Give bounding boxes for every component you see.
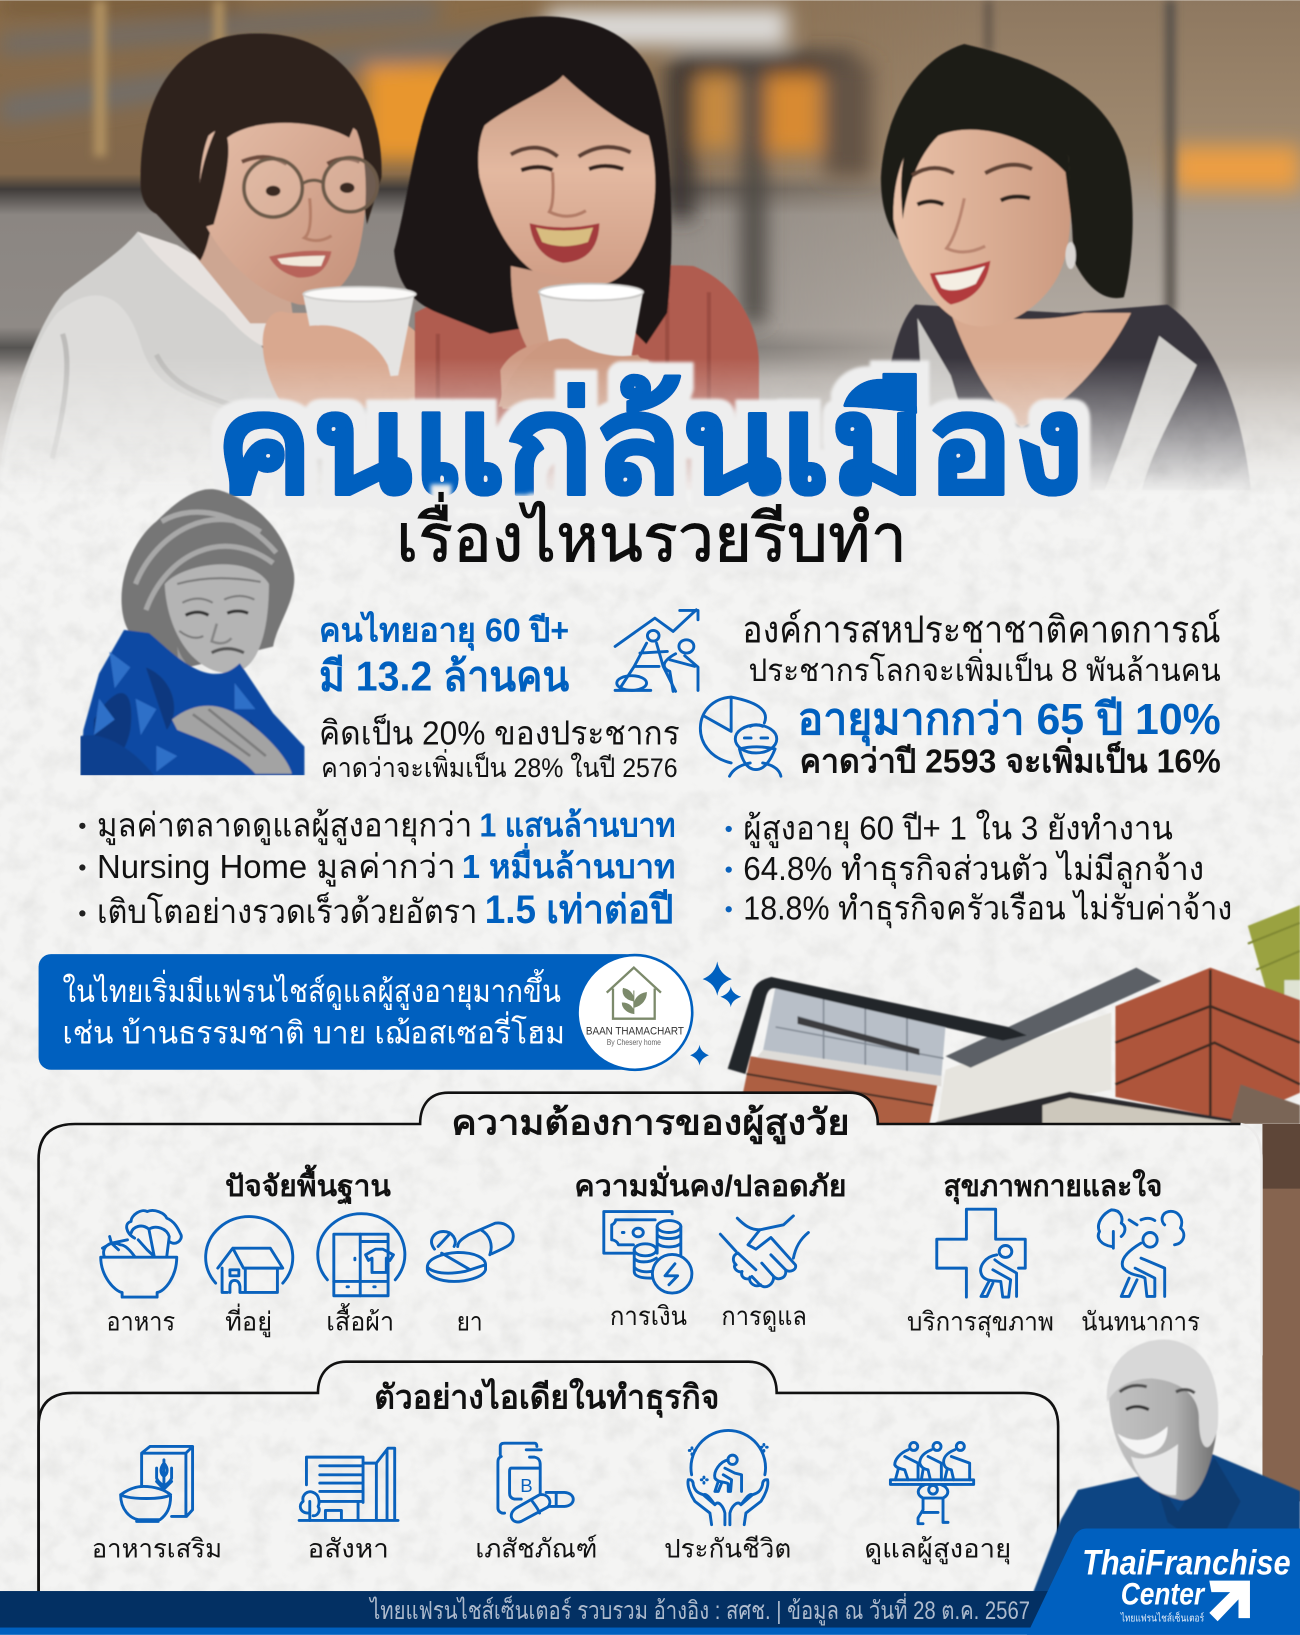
logo: Baan Thamachart: BAAN THAMACHART — [586, 1025, 684, 1037]
stat: UN world population: คาดว่าปี 2593 จะเพิ่มเป็น 16% — [800, 737, 1221, 781]
heading: ตัวอย่างไอเดียในทำธุรกิจ — [374, 1378, 719, 1419]
icon: handshake — [720, 1216, 808, 1287]
callout banner: franchise examples — [39, 954, 692, 1070]
market value bullets: มูลค่าตลาดดูแลผู้สูงอายุกว่า — [97, 807, 472, 845]
heading: basics: ปัจจัยพื้นฐาน — [225, 1164, 391, 1205]
stat: Thai elderly population: คาดว่าจะเพิ่มเป็น 28% ในปี 2576 — [321, 749, 678, 783]
icon: food bowl — [101, 1210, 181, 1297]
stat: Thai elderly population: คนไทยอายุ 60 ปี+ — [319, 610, 569, 651]
label: life insurance: ประกันชีวิต — [664, 1534, 791, 1564]
market value bullets: 1.5 เท่าต่อปี — [485, 888, 673, 932]
woman right — [881, 44, 1251, 490]
stat: UN world population: อายุมากกว่า 65 ปี 10% — [798, 695, 1221, 747]
heading: health: สุขภาพกายและใจ — [943, 1169, 1162, 1204]
icon: real estate building — [299, 1448, 398, 1520]
woman left — [0, 33, 422, 490]
stat: Thai elderly population: คิดเป็น 20% ของประชากร — [319, 713, 680, 753]
working elders bullets: 18.8% ทำธุรกิจครัวเรือน ไม่รับค่าจ้าง — [743, 890, 1232, 929]
photo: care home building — [728, 905, 1300, 1128]
subtitle: เรื่องไหนรวยรีบทำ — [396, 492, 907, 576]
working elders bullets — [726, 809, 1232, 929]
icon: pie chart with old man — [700, 697, 781, 776]
icon: pills — [427, 1223, 513, 1281]
stat: UN world population: องค์การสหประชาชาติคาดการณ์ — [742, 608, 1221, 650]
panel: needs of the elderly — [39, 1093, 1261, 1595]
icon: rising arrow with elders — [615, 610, 698, 691]
label: recreation: นันทนาการ — [1081, 1306, 1200, 1336]
logo: Baan Thamachart: By Chesery home — [607, 1038, 661, 1047]
label: property: อสังหา — [308, 1534, 389, 1564]
icon: hands holding elder — [688, 1430, 768, 1525]
icon: vitamin bottle and capsules — [498, 1443, 573, 1522]
stat: UN world population: ประชากรโลกจะเพิ่มเป็น 8 พันล้านคน — [749, 648, 1221, 688]
label: finance: การเงิน — [610, 1301, 687, 1331]
label: supplements: อาหารเสริม — [92, 1534, 222, 1564]
logo: ThaiFranchise Center — [1027, 1528, 1300, 1635]
label: medicine: ยา — [457, 1306, 483, 1336]
photo: smiling old man — [1032, 1340, 1300, 1595]
photo backdrop — [0, 0, 1300, 511]
label: food: อาหาร — [106, 1306, 175, 1336]
logo: Baan Thamachart — [578, 955, 692, 1070]
icon: cereal box and rice bowl — [121, 1446, 193, 1521]
label: health services: บริการสุขภาพ — [907, 1306, 1054, 1337]
title: คนแก่ล้นเมือง — [216, 368, 1084, 522]
label: housing: ที่อยู่ — [225, 1303, 272, 1337]
label: clothing: เสื้อผ้า — [326, 1302, 394, 1336]
stat: UN world population — [742, 608, 1221, 781]
photo: old woman with blue shawl — [80, 489, 304, 776]
label: care: การดูแล — [721, 1301, 807, 1332]
market value bullets: Nursing Home มูลค่ากว่า — [97, 849, 456, 887]
sparkles — [690, 961, 741, 1066]
label: pharma: เภสัชภัณฑ์ — [475, 1534, 597, 1564]
icon: wardrobe — [318, 1214, 405, 1296]
working elders bullets: 64.8% ทำธุรกิจส่วนตัว ไม่มีลูกจ้าง — [743, 850, 1204, 889]
icon: money and coins — [604, 1212, 692, 1293]
icon: vitamin bottle and capsules: B — [520, 1475, 533, 1496]
icon: recreation trees and elder — [1098, 1210, 1184, 1296]
callout banner: franchise examples: เช่น บ้านธรรมชาติ บาย เฌ้อสเซอรี่โฮม — [63, 1011, 565, 1051]
heading: security: ความมั่นคง/ปลอดภัย — [574, 1165, 847, 1203]
label: elderly care: ดูแลผู้สูงอายุ — [864, 1534, 1011, 1565]
footer bar — [0, 1591, 1300, 1635]
market value bullets: 1 แสนล้านบาท — [480, 807, 676, 844]
logo: ThaiFranchise Center: Center — [1121, 1577, 1206, 1612]
working elders bullets: ผู้สูงอายุ 60 ปี+ 1 ใน 3 ยังทำงาน — [743, 809, 1173, 848]
heading: ความต้องการของผู้สูงวัย — [451, 1102, 850, 1144]
market value bullets: เติบโตอย่างรวดเร็วด้วยอัตรา — [97, 891, 477, 931]
icon: medical cross with elder — [937, 1209, 1025, 1297]
callout banner: franchise examples: ในไทยเริ่มมีแฟรนไชส์ดูแลผู้สูงอายุมากขึ้น — [63, 968, 561, 1011]
stat: Thai elderly population: มี 13.2 ล้านคน — [319, 652, 570, 699]
market value bullets: 1 หมื่นล้านบาท — [462, 842, 676, 886]
icon: helper carrying elders — [890, 1442, 974, 1524]
market value bullets — [79, 807, 676, 932]
brown wall strip at right edge — [1262, 1124, 1300, 1501]
stat: Thai elderly population — [319, 610, 680, 783]
paper cups — [283, 284, 650, 409]
hero photo: three smiling older women — [0, 0, 1300, 511]
logo: ThaiFranchise Center: ไทยแฟรนไชส์เซ็นเตอร์ — [1120, 1610, 1204, 1624]
panel: business ideas — [39, 1362, 1058, 1593]
woman middle — [394, 16, 759, 490]
footer bar: ไทยแฟรนไชส์เซ็นเตอร์ รวบรวม อ้างอิง : สศช. | ข้อมูล ณ วันที่ 28 ต.ค. 2567 — [368, 1593, 1030, 1626]
icon: house — [206, 1217, 293, 1292]
